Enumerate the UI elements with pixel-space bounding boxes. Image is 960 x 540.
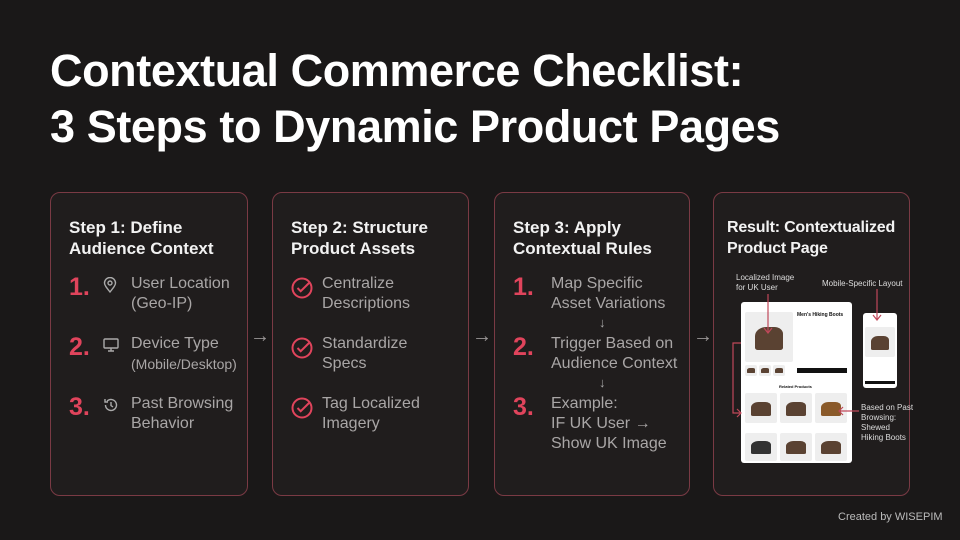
title: Contextual Commerce Checklist: — [50, 45, 743, 96]
check: imagery: Tag Localized — [322, 395, 420, 412]
check: specs — [292, 335, 407, 372]
rule 2: 2. — [513, 333, 534, 361]
item: device type: (Mobile/Desktop) — [131, 356, 237, 372]
desktop mockup — [741, 302, 852, 463]
down arrow: ↓ — [599, 375, 606, 390]
arrow 1: → — [250, 325, 270, 347]
mobile mockup — [863, 313, 897, 388]
item: user location: User Location — [131, 275, 230, 292]
panel: result — [713, 192, 910, 496]
panel: step 1 — [50, 192, 248, 496]
item: past browsing — [69, 393, 233, 432]
item: device type — [69, 333, 237, 372]
rule 1: Map Specific — [551, 275, 643, 292]
check: centralize — [292, 275, 410, 312]
annotation: localized image: for UK User — [736, 283, 778, 292]
item: user location: (Geo-IP) — [131, 295, 192, 312]
annotation: past browsing: Shewed — [861, 423, 890, 432]
rule 3 — [513, 393, 667, 452]
step 3 heading — [513, 218, 652, 258]
annotation: past browsing: Browsing: — [861, 413, 896, 422]
rule 2: Audience Context — [551, 355, 677, 372]
check: centralize: Centralize — [322, 275, 394, 292]
annotation: localized image: Localized Image — [736, 273, 794, 282]
result heading: Product Page — [727, 240, 828, 257]
annotation: past browsing: Hiking Boots — [861, 433, 906, 442]
step 2 heading: Product Assets — [291, 239, 415, 258]
annotation: mobile: Mobile-Specific Layout — [822, 279, 902, 288]
step 1 heading — [69, 218, 214, 258]
item: past browsing: Behavior — [131, 415, 194, 432]
annotation: past browsing: Based on Past — [861, 403, 913, 412]
footer credit: Created by WISEPIM — [838, 511, 943, 523]
desktop mockup: Men's Hiking Boots — [797, 312, 843, 318]
step 3 heading: Contextual Rules — [513, 239, 652, 258]
rule 1: Asset Variations — [551, 295, 665, 312]
title — [50, 45, 780, 152]
arrow 2: → — [472, 325, 492, 347]
check: specs: Standardize — [322, 335, 407, 352]
annotation: localized image — [736, 273, 794, 292]
result heading — [727, 219, 895, 257]
rule 3: Example: — [551, 395, 618, 412]
desktop mockup: Related Products — [779, 384, 812, 389]
result heading: Result: Contextualized — [727, 219, 895, 236]
check: imagery: Imagery — [322, 415, 380, 432]
annotation: past browsing — [861, 403, 914, 442]
item: past browsing: 3. — [69, 393, 90, 421]
panel: step 3 — [494, 192, 690, 496]
check: centralize: Descriptions — [322, 295, 410, 312]
title: 3 Steps to Dynamic Product Pages — [50, 101, 780, 152]
step 1 heading: Audience Context — [69, 239, 214, 258]
panel: step 2 — [272, 192, 469, 496]
item: device type: Device Type — [131, 335, 219, 352]
pointer arrows — [732, 289, 882, 418]
item: user location: 1. — [69, 273, 90, 301]
down arrow: ↓ — [599, 315, 606, 330]
rule 3: 3. — [513, 393, 534, 421]
step 1 heading: Step 1: Define — [69, 218, 182, 237]
step 2 heading: Step 2: Structure — [291, 218, 428, 237]
check: specs: Specs — [322, 355, 366, 372]
rule 2: Trigger Based on — [551, 335, 673, 352]
step 3 heading: Step 3: Apply — [513, 218, 621, 237]
item: device type: 2. — [69, 333, 90, 361]
rule 1: 1. — [513, 273, 534, 301]
rule 3: Show UK Image — [551, 435, 667, 452]
item: user location — [69, 273, 230, 312]
item: past browsing: Past Browsing — [131, 395, 233, 412]
check: imagery — [292, 395, 420, 432]
step 2 heading — [291, 218, 428, 258]
rule 2 — [513, 333, 678, 372]
arrow 3: → — [693, 325, 713, 347]
rule 3: IF UK User → — [551, 415, 651, 432]
rule 1 — [513, 273, 665, 312]
